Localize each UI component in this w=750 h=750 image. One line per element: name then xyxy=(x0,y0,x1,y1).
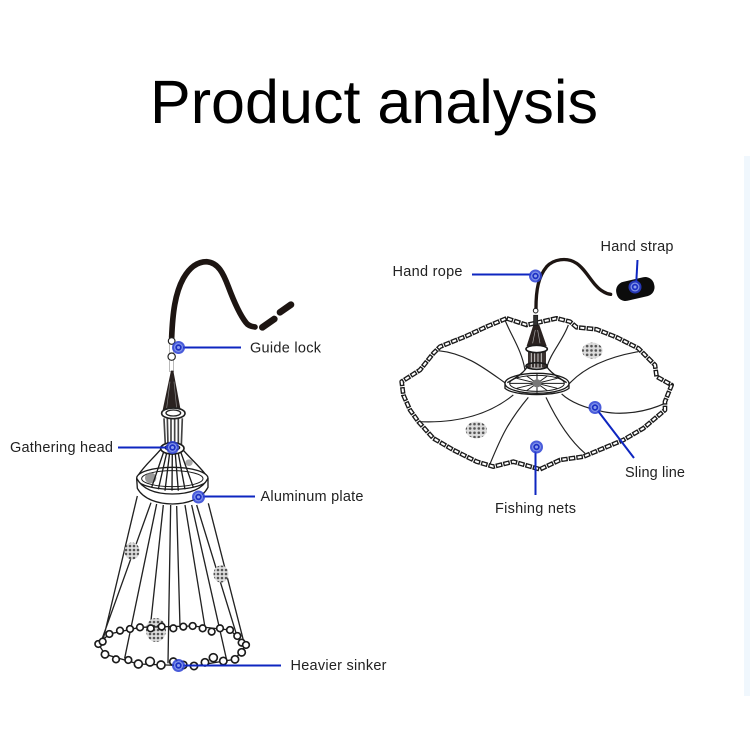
sinker chain, closed net xyxy=(95,623,249,670)
hand strap xyxy=(614,275,656,303)
callout: gathering head xyxy=(10,440,179,456)
mesh patches, closed net xyxy=(124,542,228,642)
callout: aluminum plate: Aluminum plate xyxy=(260,489,364,505)
gathering head, open net xyxy=(526,308,547,369)
callout: guide lock xyxy=(172,340,322,356)
chain, open net xyxy=(402,318,672,469)
callout: sling line: Sling line xyxy=(625,465,685,481)
callout: hand rope: Hand rope xyxy=(392,264,462,280)
callout: fishing nets: Fishing nets xyxy=(495,501,576,517)
callout: gathering head: Gathering head xyxy=(10,440,113,456)
callout: heavier sinker xyxy=(172,658,387,674)
sling lines, closed net xyxy=(102,496,243,663)
hand rope, closed net xyxy=(172,262,291,337)
background strip xyxy=(744,156,750,696)
callout: sling line xyxy=(588,401,685,481)
sling lines, open net xyxy=(418,320,665,464)
title: Product analysis xyxy=(150,68,598,136)
guide lock beads and cone xyxy=(162,338,185,445)
callout: hand strap xyxy=(600,239,674,294)
callout: hand rope xyxy=(392,264,542,282)
callout: fishing nets xyxy=(495,440,576,517)
illustration: closed cast net xyxy=(95,262,291,670)
mesh patches, open net xyxy=(466,343,603,438)
aluminum plate, open net xyxy=(505,365,569,395)
hand rope, open net xyxy=(536,260,611,308)
gathering head and aluminum plate xyxy=(137,443,208,504)
callout: heavier sinker: Heavier sinker xyxy=(290,658,387,674)
callout: guide lock: Guide lock xyxy=(250,340,322,356)
callout: aluminum plate xyxy=(192,489,364,505)
illustration: open cast net xyxy=(402,260,672,469)
callout: hand strap: Hand strap xyxy=(600,239,674,255)
